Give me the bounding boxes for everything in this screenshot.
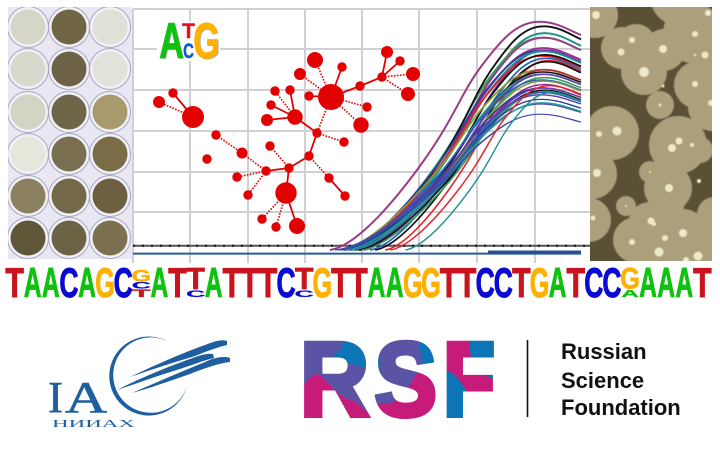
logo: ATG sequence mark: C bbox=[183, 38, 194, 63]
sequence logo: T bbox=[440, 259, 458, 306]
logo letters IA: A bbox=[65, 373, 107, 422]
panel: culture plate photo bbox=[8, 6, 132, 259]
logo letters IA: I bbox=[48, 373, 63, 422]
logo: ATG sequence mark: A bbox=[160, 15, 185, 71]
sequence logo: T bbox=[458, 259, 476, 306]
logo: RSF letters: R bbox=[300, 322, 369, 438]
logo: RSF letters: F bbox=[443, 322, 495, 438]
sequence logo: C bbox=[295, 289, 314, 299]
sequence logo: A bbox=[621, 288, 639, 299]
chart baseline: dark threshold line bbox=[133, 245, 590, 247]
logo comet streaks bbox=[117, 340, 230, 393]
sequence logo: T bbox=[512, 259, 531, 306]
sequence logo: T bbox=[132, 287, 151, 299]
sequence logo: G bbox=[530, 261, 549, 307]
text: Russian Science Foundation: Russian bbox=[561, 339, 647, 364]
sequence logo: T bbox=[693, 259, 712, 306]
sequence logo: A bbox=[42, 260, 60, 307]
logo caption: НИИАХ bbox=[52, 419, 137, 430]
sequence logo: T bbox=[566, 259, 585, 306]
line chart: amplification curves bbox=[330, 22, 581, 250]
sequence logo: C bbox=[186, 289, 205, 299]
sequence logo: T bbox=[349, 259, 368, 306]
chart baseline: blue line bbox=[133, 250, 581, 254]
panel: bacterial colony photo bbox=[590, 7, 712, 261]
sequence logo: T bbox=[241, 259, 259, 306]
sequence logo: A bbox=[657, 260, 675, 307]
sequence logo bbox=[5, 259, 712, 307]
logo: RSF letters bbox=[300, 322, 495, 438]
sequence logo: G bbox=[421, 261, 441, 307]
sequence logo: G bbox=[313, 261, 332, 307]
sequence logo: C bbox=[602, 260, 621, 307]
sequence logo: A bbox=[368, 260, 385, 307]
sequence logo: A bbox=[639, 260, 657, 307]
sequence logo: C bbox=[476, 260, 495, 307]
sequence logo: C bbox=[114, 260, 133, 307]
sequence logo: C bbox=[59, 260, 78, 307]
logo letters IA bbox=[48, 373, 107, 422]
network diagram: red minimum spanning tree bbox=[153, 46, 420, 234]
sequence logo: T bbox=[331, 259, 350, 306]
sequence logo: T bbox=[186, 263, 205, 296]
logo: ATG sequence mark bbox=[157, 14, 221, 71]
sequence logo: A bbox=[386, 260, 403, 307]
sequence logo: T bbox=[259, 259, 277, 306]
sequence logo: C bbox=[132, 281, 151, 291]
logo: ATG sequence mark: T bbox=[182, 20, 195, 43]
sequence logo: A bbox=[24, 260, 41, 307]
sequence logo: C bbox=[277, 260, 296, 307]
logo: IAC institute bbox=[48, 337, 230, 430]
sequence logo: G bbox=[620, 262, 640, 295]
sequence logo: A bbox=[549, 260, 566, 307]
sequence logo: T bbox=[223, 259, 241, 306]
text: Russian Science Foundation: Foundation bbox=[561, 395, 681, 420]
logo: RSF letters: S bbox=[374, 322, 437, 438]
sequence logo: T bbox=[5, 259, 24, 306]
sequence logo: A bbox=[205, 260, 222, 307]
sequence logo: T bbox=[295, 263, 314, 296]
logo: ATG sequence mark: G bbox=[194, 15, 221, 71]
sequence logo: C bbox=[584, 260, 603, 307]
logo: ATG sequence mark: G bbox=[193, 14, 220, 70]
sequence logo: G bbox=[132, 267, 151, 285]
logo crescent bbox=[109, 337, 187, 416]
sequence logo: A bbox=[151, 260, 168, 307]
sequence logo: T bbox=[168, 259, 187, 306]
logo: ATG sequence mark: A bbox=[159, 14, 184, 70]
sequence logo: G bbox=[403, 261, 423, 307]
sequence logo: A bbox=[676, 260, 693, 307]
sequence logo: C bbox=[494, 260, 513, 307]
text: Russian Science Foundation bbox=[561, 339, 681, 420]
sequence logo: G bbox=[95, 261, 115, 307]
sequence logo: A bbox=[78, 260, 96, 307]
divider bbox=[526, 340, 528, 417]
text: Russian Science Foundation: Science bbox=[561, 368, 644, 393]
